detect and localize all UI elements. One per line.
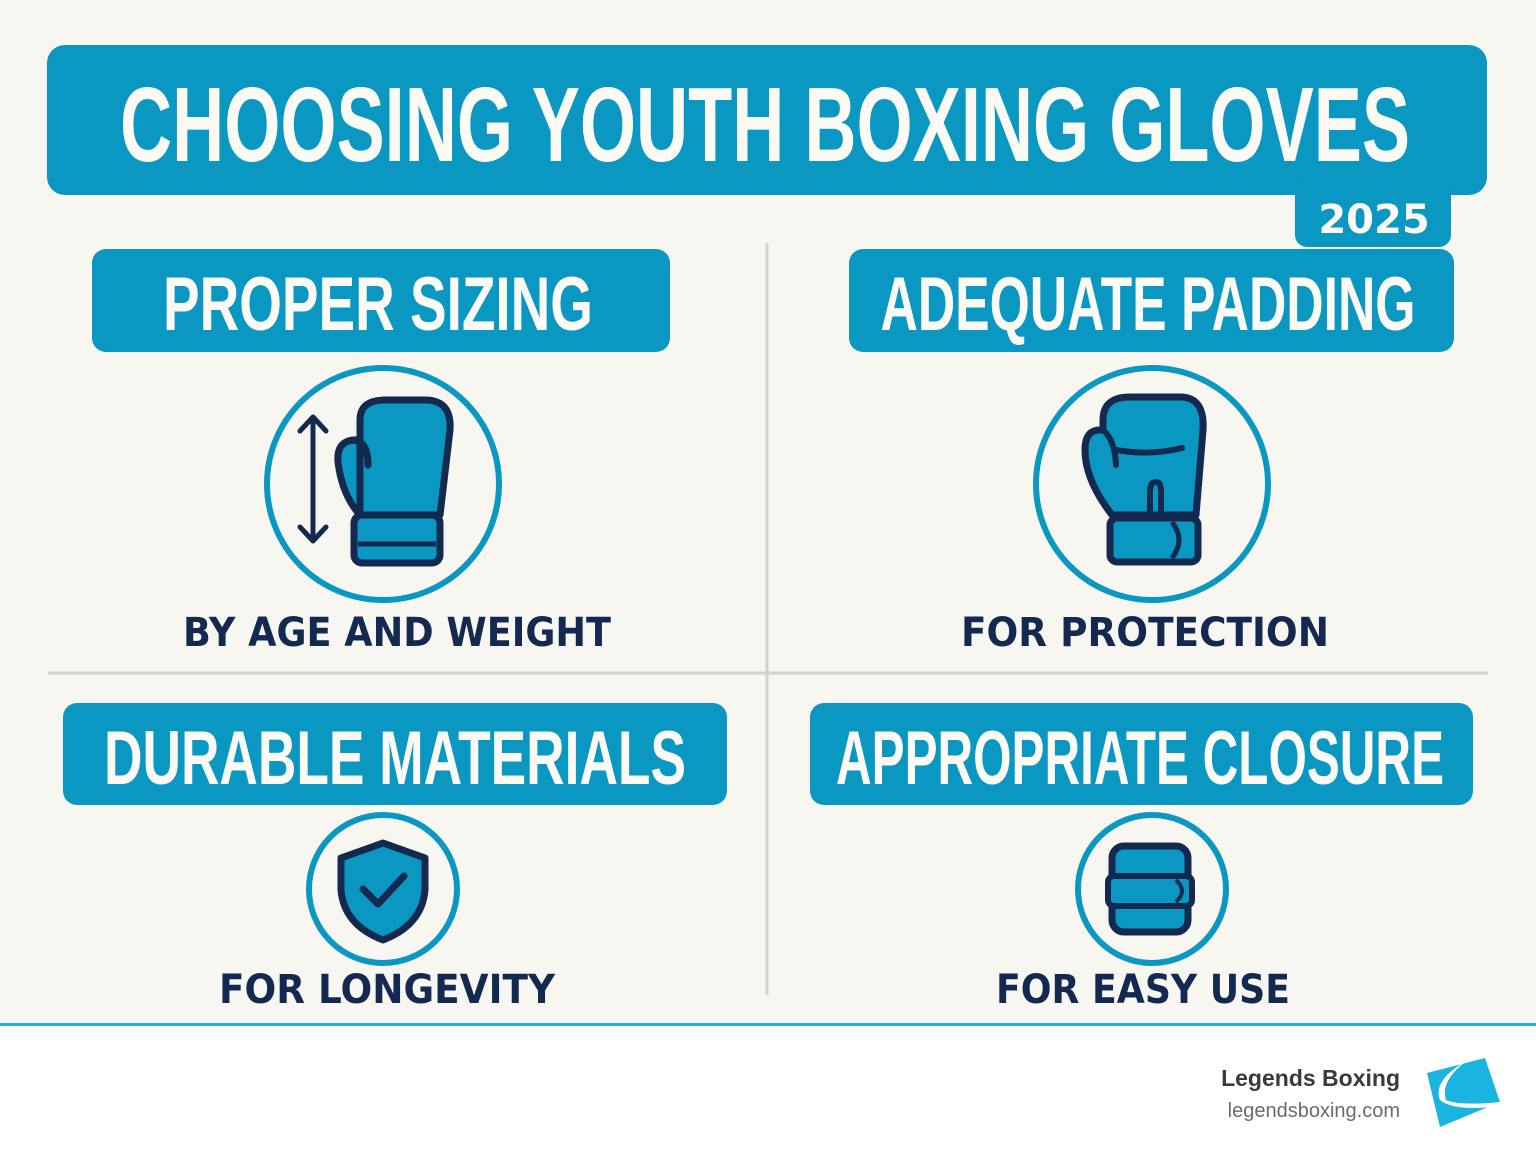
heading: durable materials: DURABLE MATERIALS — [104, 716, 686, 801]
year tab — [1295, 180, 1451, 247]
caption: for easy use: FOR EASY USE — [996, 967, 1290, 1013]
panel: durable materials — [63, 703, 727, 1013]
panel: appropriate closure — [810, 703, 1473, 1013]
footer brand text: Legends Boxing — [1221, 1065, 1400, 1091]
panel: proper sizing — [92, 249, 670, 656]
logo — [1427, 1058, 1500, 1127]
icon: padded glove — [1036, 368, 1268, 600]
caption: for longevity: FOR LONGEVITY — [219, 967, 556, 1013]
heading: proper sizing: PROPER SIZING — [163, 262, 593, 347]
heading: proper sizing — [92, 249, 670, 352]
footer — [0, 1023, 1536, 1154]
year tab: 2025 — [1318, 197, 1430, 243]
footer brand text — [1221, 1065, 1400, 1122]
icon: shield check — [309, 815, 457, 963]
footer brand text: legendsboxing.com — [1228, 1100, 1400, 1122]
icon: closure strap — [1078, 815, 1226, 963]
panel: adequate padding — [849, 249, 1454, 656]
caption: for protection: FOR PROTECTION — [961, 610, 1329, 656]
heading: durable materials — [63, 703, 727, 805]
icon: glove with size arrow — [267, 368, 499, 600]
caption: by age and weight: BY AGE AND WEIGHT — [183, 610, 612, 656]
